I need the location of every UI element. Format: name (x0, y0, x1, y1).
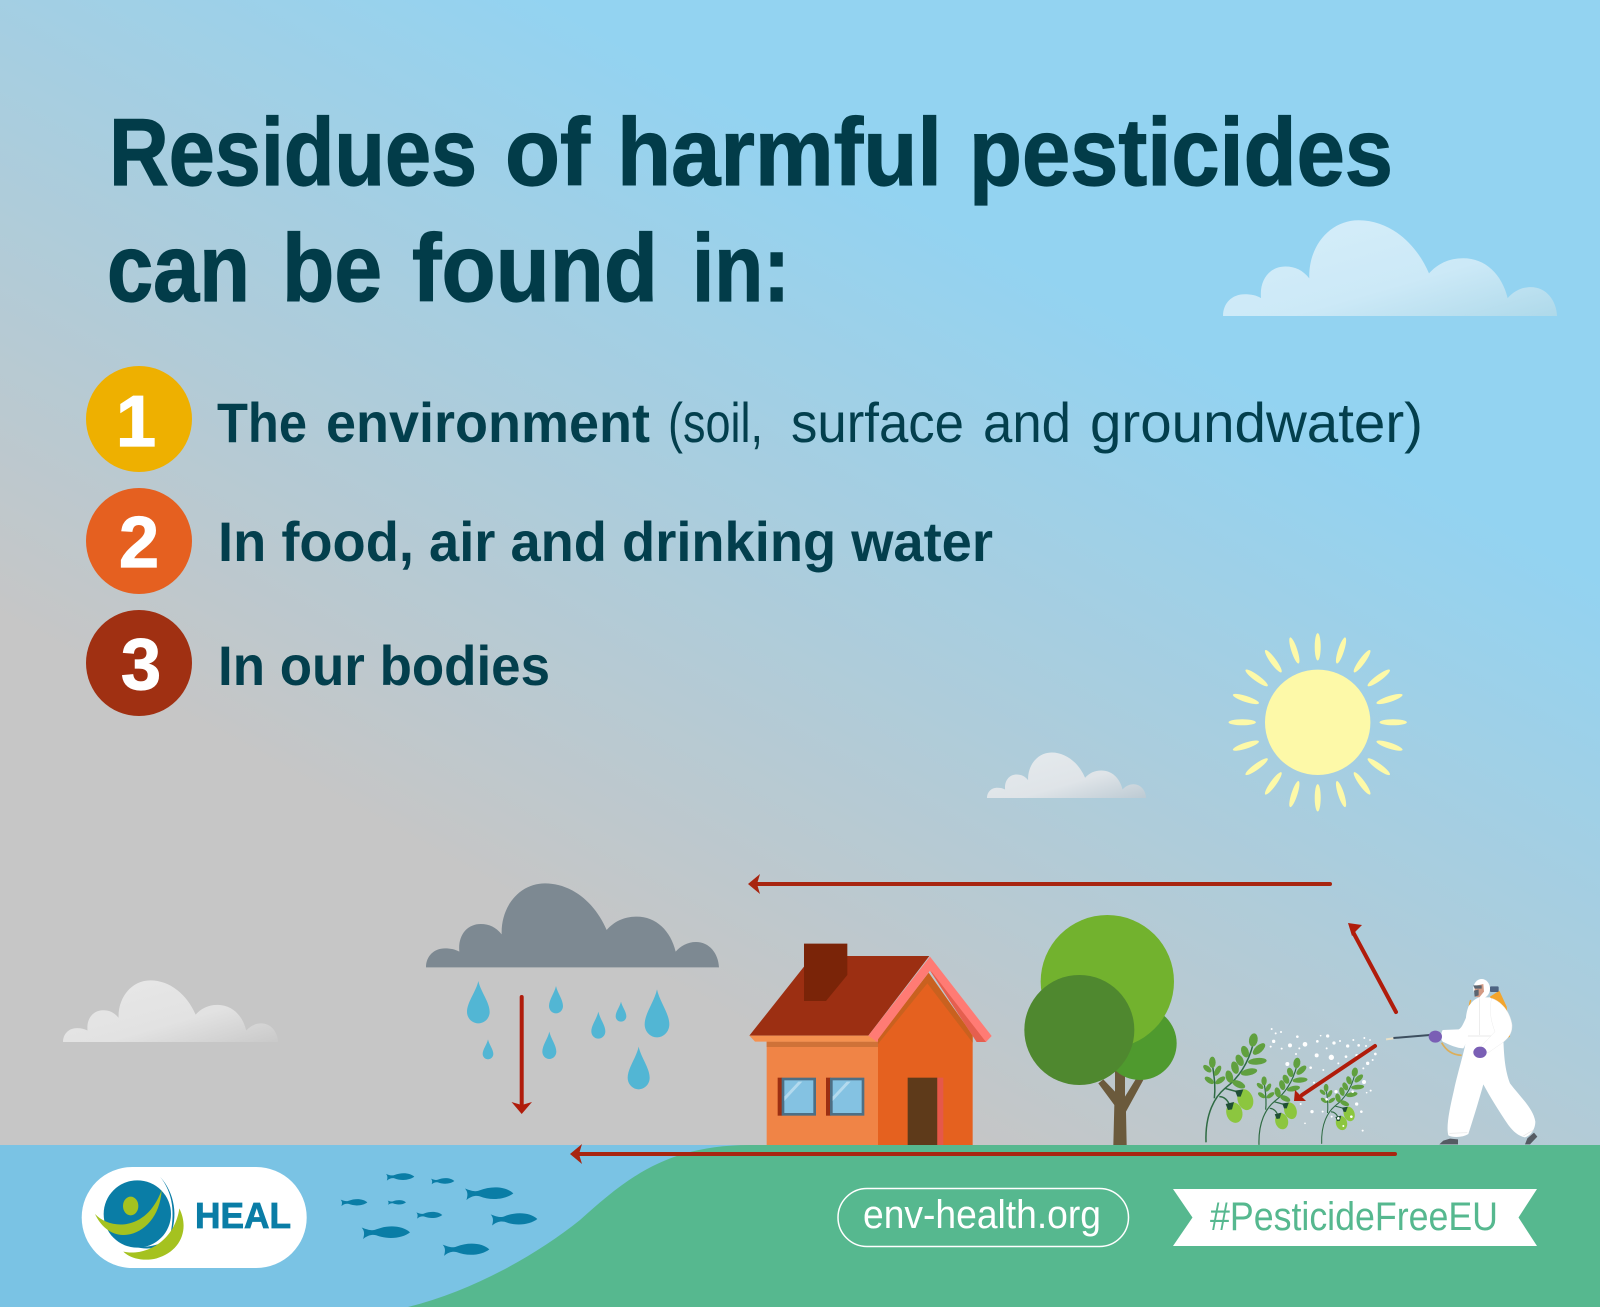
gable shadow (878, 973, 973, 1044)
title (107, 99, 1393, 322)
glove far hand (1429, 1031, 1442, 1043)
house gable wall (878, 977, 973, 1145)
list: three places residues are found (86, 366, 1423, 716)
arrow: spray drifting upward (1348, 923, 1396, 1012)
suit far arm (1441, 1015, 1469, 1048)
plants and spray (1202, 1028, 1377, 1145)
protective suit legs and torso (1448, 997, 1535, 1137)
pesticide spray dots (1270, 1028, 1377, 1132)
title: found (412, 215, 658, 322)
icon: rain drops (467, 981, 669, 1089)
list item 1 (86, 366, 1423, 472)
title: Residues (109, 99, 477, 206)
ground and water (0, 1145, 1600, 1307)
fascia shade (930, 971, 986, 1042)
arrow: runoff along ground (570, 1144, 1395, 1164)
face (1475, 984, 1484, 997)
number badge 3 (86, 610, 192, 716)
glove near hand (1473, 1047, 1487, 1058)
title: of (505, 99, 591, 206)
icon: sun (1228, 633, 1407, 812)
house (749, 944, 992, 1145)
list item 2 (86, 488, 993, 594)
roof fascia (868, 957, 992, 1042)
hood (1473, 979, 1490, 998)
tree (1024, 915, 1177, 1145)
arrow: spray onto plants (1294, 1046, 1375, 1101)
harness strap (1469, 1000, 1471, 1018)
boot back (1525, 1133, 1537, 1144)
rain cloud with drops (426, 883, 719, 1089)
item 1 text: (soil, (668, 391, 763, 454)
plant 1 (1202, 1033, 1267, 1142)
title: pesticides (969, 99, 1393, 206)
plant 3 (1319, 1067, 1364, 1144)
boot front (1439, 1139, 1458, 1144)
tree canopy light (1041, 915, 1174, 1048)
item 1 text: environment (326, 391, 650, 454)
eave shadow (767, 1042, 878, 1047)
item 1 text: groundwater) (1090, 391, 1423, 454)
item 1 text: The (217, 391, 307, 454)
list item 3 (86, 610, 550, 716)
backpack tank (1490, 991, 1510, 1042)
number 3: 3 (121, 625, 161, 705)
window 1 (778, 1078, 816, 1116)
logo wordmark: HEAL (195, 1195, 291, 1236)
window 2 (826, 1078, 864, 1116)
green land (408, 1145, 1600, 1307)
spray wand (1386, 1035, 1430, 1039)
door (908, 1078, 943, 1145)
house left wall (767, 1042, 878, 1145)
cloud: top right (1223, 220, 1557, 316)
roof (749, 956, 929, 1036)
title: harmful (617, 99, 942, 206)
chimney (804, 944, 847, 1001)
number badge 2 (86, 488, 192, 594)
item 1 text: surface (791, 391, 964, 454)
arrow: rain downward (512, 997, 532, 1114)
logo emblem (95, 1177, 184, 1260)
eave (749, 1036, 877, 1042)
number 2: 2 (119, 503, 159, 583)
title: in: (692, 215, 790, 322)
item 2 text: In food, air and drinking water (218, 510, 993, 573)
arrow: drift along the sky (748, 874, 1330, 894)
item 3 text: In our bodies (218, 634, 550, 697)
item 1 text: and (983, 391, 1071, 454)
title: be (282, 215, 382, 322)
cloud: small centre (987, 752, 1146, 798)
person spraying pesticide (1386, 979, 1537, 1144)
website pill: env-health.org (863, 1193, 1101, 1237)
HEAL logo (82, 1167, 307, 1268)
hashtag ribbon: #PesticideFreeEU (1210, 1195, 1498, 1239)
title: can (107, 215, 250, 322)
suit shading seams (1449, 998, 1533, 1136)
respirator mask (1473, 985, 1482, 997)
number 1: 1 (116, 382, 156, 462)
website pill (838, 1188, 1128, 1246)
school of fish (341, 1173, 537, 1256)
hashtag ribbon (1173, 1189, 1537, 1246)
number badge 1 (86, 366, 192, 472)
cloud: left (63, 980, 278, 1042)
tree canopy back (1103, 1007, 1177, 1080)
water (0, 1145, 1600, 1307)
tree trunk (1098, 1070, 1143, 1145)
logo pill (82, 1167, 307, 1268)
suit near arm (1481, 998, 1512, 1053)
hose (1442, 1043, 1462, 1055)
icon: grey rain cloud (426, 883, 719, 967)
plant 2 (1256, 1057, 1308, 1145)
backpack cap (1490, 986, 1499, 992)
tree canopy front (1024, 975, 1134, 1085)
